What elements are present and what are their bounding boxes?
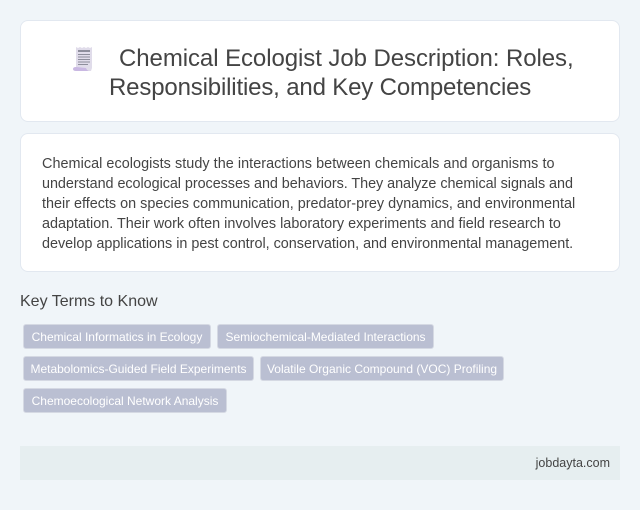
tag: Chemical Informatics in Ecology <box>32 330 202 344</box>
tag list <box>23 324 504 413</box>
tag <box>23 388 227 413</box>
panel: description card <box>20 133 620 272</box>
tag <box>23 324 211 349</box>
description text: their effects on species communication, predator-prey dynamics, and environmental <box>42 196 575 212</box>
description text: develop applications in pest control, conservation, and environmental management. <box>42 236 573 252</box>
footer text: jobdayta.com <box>536 456 610 470</box>
tag: Metabolomics-Guided Field Experiments <box>30 362 247 376</box>
tag: Volatile Organic Compound (VOC) Profiling <box>267 362 497 376</box>
description text: adaptation. Their work often involves laboratory experiments and field research to <box>42 216 561 232</box>
icon: document scroll <box>73 47 92 71</box>
tag: Semiochemical-Mediated Interactions <box>225 330 426 344</box>
description text: Chemical ecologists study the interactions between chemicals and organisms to <box>42 156 555 172</box>
tag <box>23 356 254 381</box>
title <box>109 45 574 101</box>
text: Chemical Ecologist Job Description: Roles, <box>119 45 574 72</box>
tag <box>217 324 434 349</box>
text: Responsibilities, and Key Competencies <box>109 74 531 101</box>
panel: title card <box>20 20 620 122</box>
tag <box>260 356 504 381</box>
tag: Chemoecological Network Analysis <box>32 394 218 408</box>
description text: understand ecological processes and behaviors. They analyze chemical signals and <box>42 176 573 192</box>
heading: key terms: Key Terms to Know <box>20 293 158 310</box>
footer bar <box>20 446 620 480</box>
